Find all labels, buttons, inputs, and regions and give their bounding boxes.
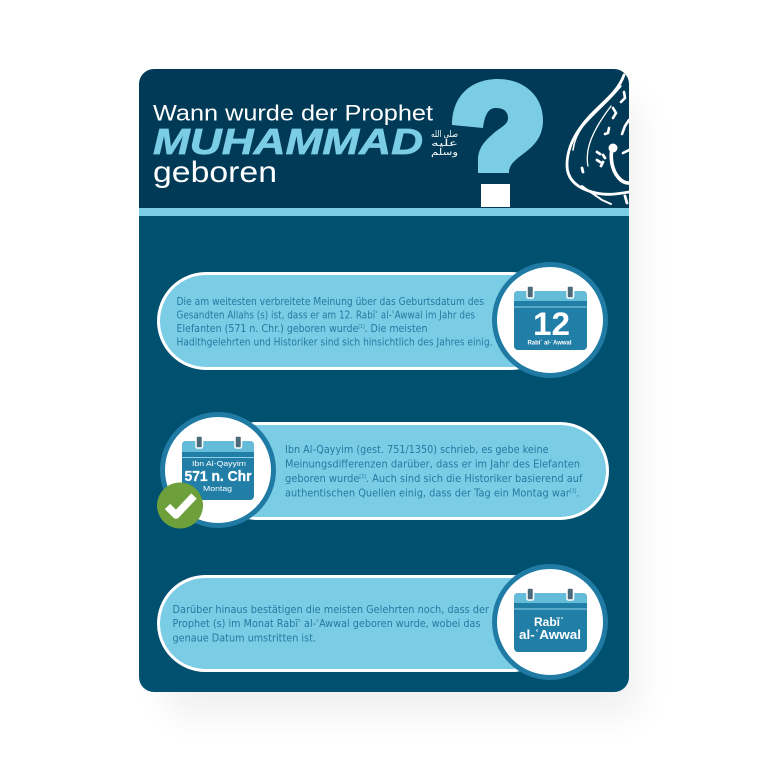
text block 2 (285, 443, 583, 500)
text block 2: [3] (570, 488, 576, 494)
text block 2: authentischen Quellen einig, dass der Tag ein Montag war (285, 486, 599, 500)
text block 1: [1] (358, 324, 365, 330)
text block 2: [2] (359, 474, 366, 480)
title: Wann wurde der Prophet (153, 100, 434, 126)
icon: calendar 12 (494, 264, 606, 376)
text block 1 (176, 295, 492, 348)
text block 2: geboren wurde (285, 472, 366, 485)
icon: honorific: وسلم (431, 147, 458, 158)
header accent band (139, 208, 629, 216)
icon: question mark (452, 79, 543, 207)
text block 2: . Auch sind sich die Historiker basierend auf (366, 472, 583, 485)
icon: calendar month: Rabīʿ (534, 615, 564, 629)
icon: calendar 571: Ibn Al-Qayyim (192, 459, 246, 468)
text block 2: . (576, 486, 579, 500)
text block 2: Ibn Al-Qayyim (gest. 751/1350) schrieb, es gebe keine (285, 443, 549, 456)
title: MUHAMMAD (153, 121, 423, 162)
card (139, 69, 629, 692)
text block 1: Hadithgelehrten und Historiker sind sich hinsichtlich des Jahres einig. (176, 336, 492, 348)
icon: calendar 12: Rabīʿ al-ʿAwwal (528, 338, 572, 346)
icon: honorific: عليه (431, 138, 458, 148)
card shadow (165, 100, 640, 715)
icon: calendar 571: Montag (203, 486, 232, 493)
text block 1: Die am weitesten verbreitete Meinung über das Geburtsdatum des (176, 295, 484, 308)
panel: pill 2 (157, 414, 608, 528)
icon: calendar 571 (162, 414, 274, 526)
panel: body background (139, 206, 629, 692)
icon: calendar 571: 571 n. Chr (184, 468, 252, 485)
icon: honorific: صلى الله (431, 129, 458, 139)
text block 3: Darüber hinaus bestätigen die meisten Gelehrten noch, dass der (172, 603, 489, 616)
text block 1: Gesandten Allahs (s) ist, dass er am 12. Rabīʿ al-ʿAwwal im Jahr des (176, 308, 475, 322)
title: geboren (153, 156, 277, 189)
text block 2: Meinungsdifferenzen darüber, dass er im Jahr des Elefanten (285, 458, 580, 470)
text block 1: Elefanten (571 n. Chr.) geboren wurde (176, 322, 384, 335)
icon: calendar month (494, 566, 606, 678)
text block 3: genaue Datum umstritten ist. (172, 632, 316, 644)
icon: calendar month: al-ʿAwwal (519, 628, 581, 642)
icon: honorific (431, 129, 458, 158)
title (153, 100, 434, 189)
panel: pill 1 (158, 264, 606, 376)
text block 3: Prophet (s) im Monat Rabīʿ al-ʿAwwal geboren wurde, wobei das (172, 617, 481, 630)
icon: calligraphy emblem (567, 75, 629, 204)
panel: header background (139, 69, 629, 208)
panel: pill 3 (158, 566, 606, 678)
text block 3 (172, 603, 489, 644)
icon: calendar 12: 12 (533, 306, 570, 342)
text block 1: . Die meisten (365, 322, 428, 335)
icon: green check (157, 482, 203, 528)
